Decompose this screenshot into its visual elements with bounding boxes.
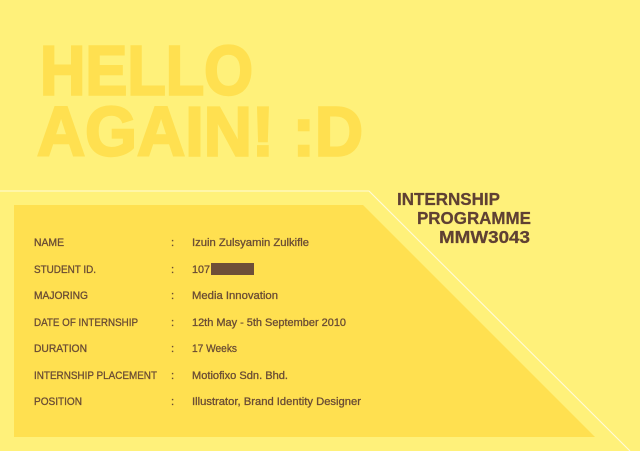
row: date of internship — [34, 317, 346, 329]
row: duration: : — [171, 343, 174, 355]
row: internship placement — [34, 370, 288, 382]
row: date of internship: : — [171, 317, 174, 329]
row: date of internship: DATE OF INTERNSHIP — [34, 317, 138, 329]
heading: internship programme: MMW3043 — [439, 227, 530, 247]
row: position: : — [171, 396, 174, 408]
title: hello again: AGAIN! :D — [37, 92, 363, 170]
heading: internship programme: INTERNSHIP — [397, 189, 500, 209]
row: majoring: : — [171, 290, 174, 302]
row: majoring: Media Innovation — [192, 290, 278, 302]
title: hello again — [37, 32, 363, 170]
panel: details background — [14, 205, 595, 437]
row: position: POSITION — [34, 396, 82, 408]
row: duration: 17 Weeks — [192, 343, 237, 355]
row: duration: DURATION — [34, 343, 87, 355]
row: position: Illustrator, Brand Identity Designer — [192, 396, 361, 408]
row: student id: 107 — [192, 264, 210, 276]
row: name: Izuin Zulsyamin Zulkifle — [192, 237, 309, 249]
details list — [34, 237, 361, 408]
row: name: NAME — [34, 237, 64, 249]
white outline line — [0, 191, 630, 451]
row: name — [34, 237, 309, 249]
heading: internship programme: PROGRAMME — [417, 208, 531, 228]
heading: internship programme — [397, 189, 531, 247]
row: majoring: MAJORING — [34, 290, 88, 302]
row: internship placement: Motiofixo Sdn. Bhd. — [192, 370, 288, 382]
row: majoring — [34, 290, 278, 302]
row: student id — [34, 263, 254, 276]
title: hello again: HELLO — [40, 32, 253, 110]
row: student id: : — [171, 264, 174, 276]
row: name: : — [171, 237, 174, 249]
row: internship placement: INTERNSHIP PLACEMENT — [34, 370, 157, 382]
row: date of internship: 12th May - 5th September 2010 — [192, 317, 346, 329]
row: duration — [34, 343, 237, 355]
redacted id block — [211, 263, 254, 275]
row: internship placement: : — [171, 370, 174, 382]
row: student id: STUDENT ID. — [34, 264, 96, 276]
row: position — [34, 396, 361, 408]
